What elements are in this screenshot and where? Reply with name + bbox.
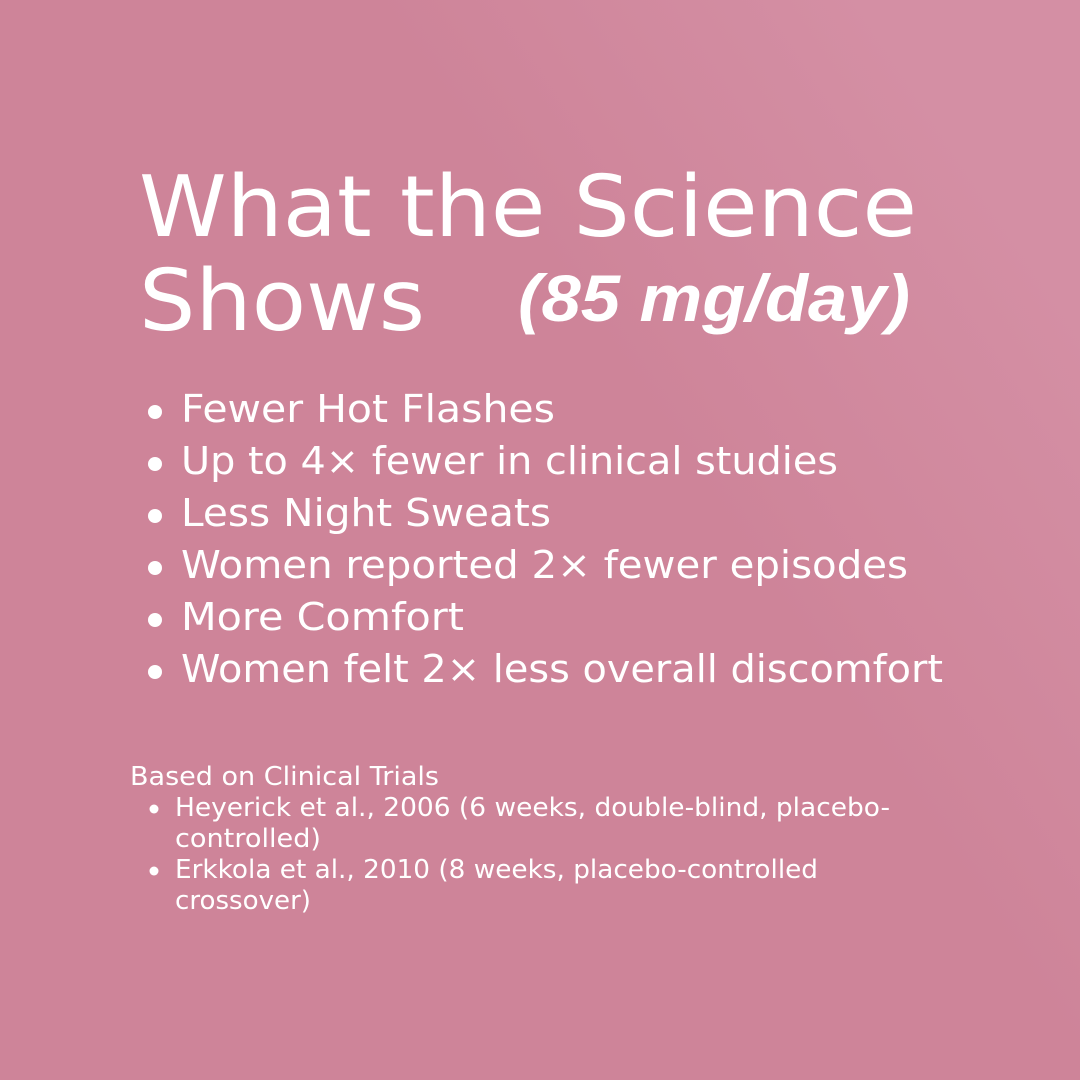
- reference: Erkkola: [150, 855, 818, 916]
- benefit: 2x fewer episodes: Women reported 2× fewer episodes: [181, 543, 908, 587]
- references: [130, 762, 890, 916]
- benefit: less night sweats: Less Night Sweats: [181, 491, 551, 535]
- benefit: more comfort: More Comfort: [181, 595, 464, 639]
- title: Shows: [139, 252, 425, 351]
- list: key benefits: [148, 387, 943, 691]
- reference: Heyerick: controlled): [175, 824, 321, 854]
- benefit: up to 4x fewer: Up to 4× fewer in clinical studies: [181, 439, 838, 483]
- references heading: Based on Clinical Trials: [130, 762, 439, 792]
- reference: Heyerick: [150, 793, 890, 854]
- title: What the Science: [139, 158, 917, 257]
- reference: Erkkola: crossover): [175, 886, 311, 916]
- title: [139, 158, 917, 351]
- benefit: fewer hot flashes: Fewer Hot Flashes: [181, 387, 555, 431]
- title: (85 mg/day): [518, 261, 910, 335]
- benefit: 2x less discomfort: Women felt 2× less overall discomfort: [181, 647, 943, 691]
- reference: Heyerick: Heyerick et al., 2006 (6 weeks, double-blind, placebo-: [175, 793, 890, 823]
- reference: Erkkola: Erkkola et al., 2010 (8 weeks, placebo-controlled: [175, 855, 818, 885]
